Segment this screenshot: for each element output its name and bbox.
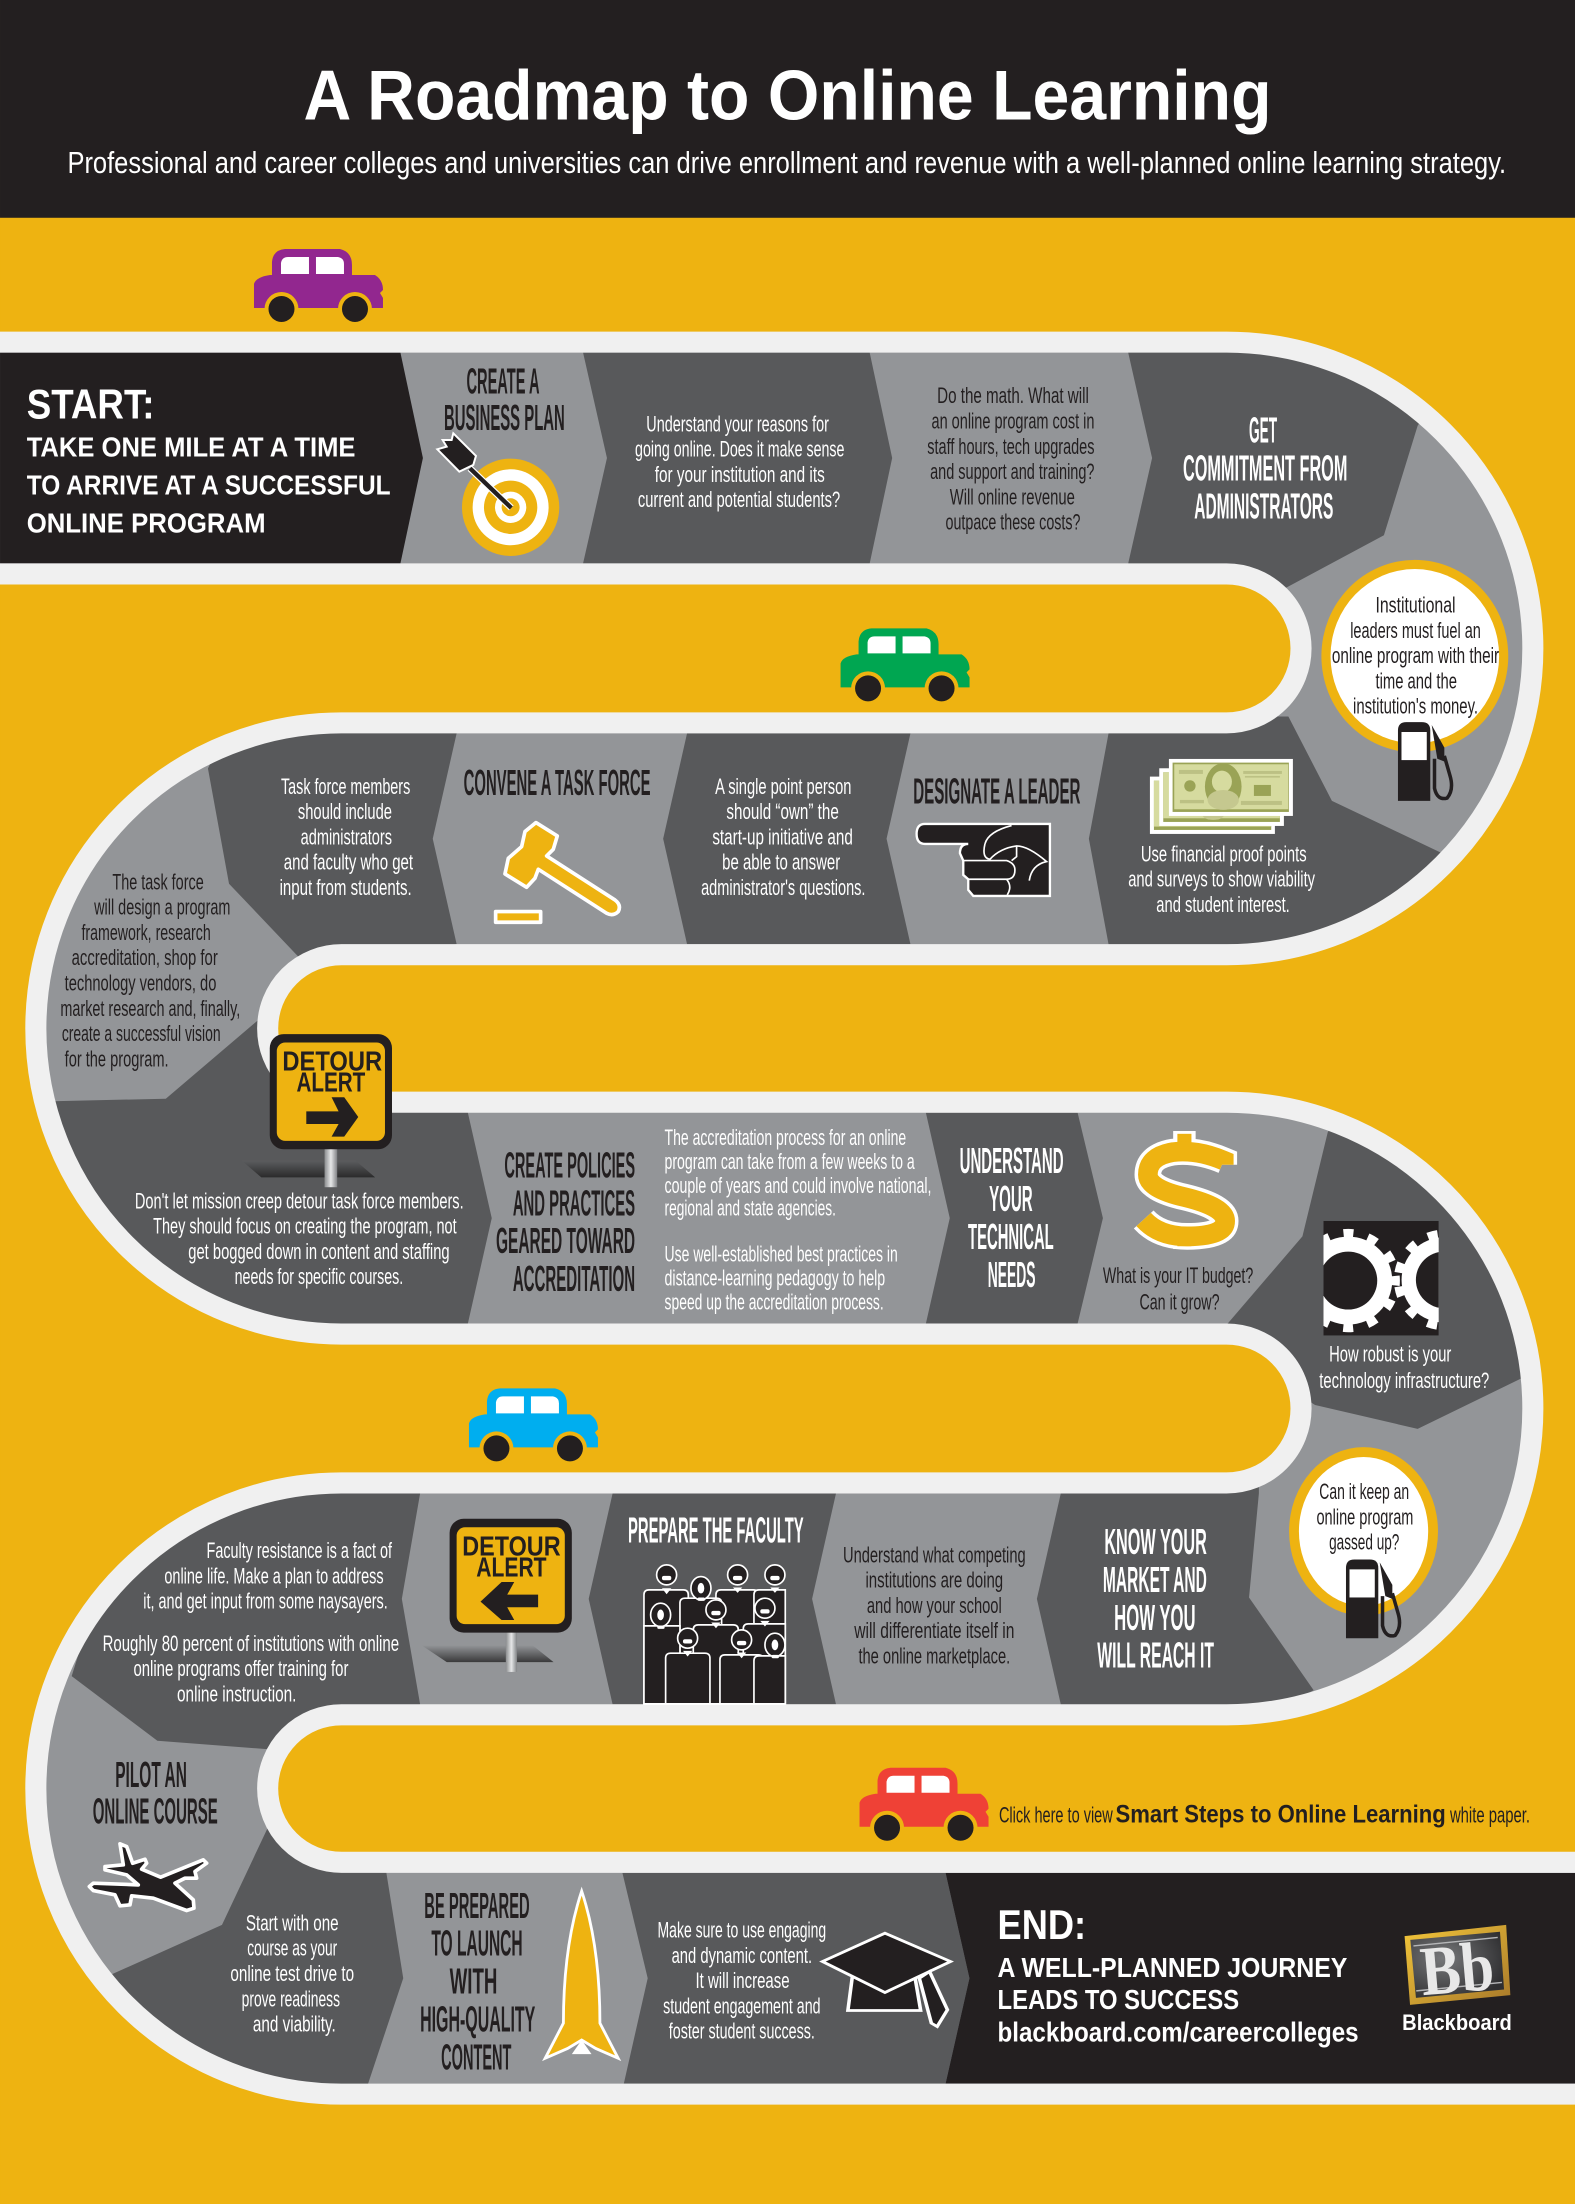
text: how robust	[1319, 1341, 1489, 1393]
icon: rocket	[545, 1891, 618, 2058]
start panel text: TO ARRIVE AT A SUCCESSFUL	[27, 470, 391, 501]
callout: institutional leaders: institution's money.	[1353, 694, 1478, 719]
text: task force members: input from students.	[280, 875, 412, 900]
link: smart steps white paper: white paper.	[1449, 1802, 1530, 1827]
text: faculty resistance: Roughly 80 percent of institutions with online	[103, 1631, 399, 1656]
text: DESIGNATE A LEADER	[913, 771, 1080, 812]
text: faculty resistance: Faculty resistance is a fact of	[207, 1538, 393, 1563]
text: UNDERSTAND	[960, 1140, 1064, 1181]
text: do the math: staff hours, tech upgrades	[927, 434, 1095, 459]
road white border	[0, 458, 1575, 1978]
text: understand your reasons: going online. Does it make sense	[635, 437, 844, 462]
text: do the math: Do the math. What will	[937, 383, 1089, 408]
text: make sure engaging	[658, 1917, 826, 2044]
text: faculty resistance: online instruction.	[177, 1681, 296, 1706]
link: smart steps white paper: Smart Steps to Online Learning	[1116, 1800, 1446, 1828]
car: red	[860, 1768, 989, 1845]
car: blue	[469, 1388, 598, 1465]
text: start with one course	[230, 1910, 354, 2037]
text: task force members: Task force members	[281, 774, 410, 799]
text: faculty resistance	[103, 1538, 399, 1706]
heading: get commitment: GET	[1249, 410, 1277, 451]
text: GEARED TOWARD	[496, 1220, 635, 1261]
text: mission creep	[135, 1188, 464, 1289]
text: the task force will design	[60, 869, 240, 1071]
end panel text	[998, 1901, 1359, 2047]
text: accreditation process: speed up the accreditation process.	[665, 1289, 884, 1314]
text: accreditation process: regional and state agencies.	[665, 1195, 836, 1220]
text: WILL REACH IT	[1097, 1635, 1214, 1676]
sign: detour alert right: ALERT	[296, 1067, 365, 1098]
end panel text: blackboard.com/careercolleges	[998, 2016, 1359, 2047]
text: task force members	[280, 774, 413, 900]
text: faculty resistance: online life. Make a plan to address	[164, 1563, 384, 1588]
text: mission creep: get bogged down in content and staffing	[188, 1239, 450, 1264]
car: green	[841, 628, 970, 705]
sign: detour alert right	[242, 1034, 392, 1187]
text: understand your reasons: for your institution and its	[655, 462, 825, 487]
text: do the math: outpace these costs?	[946, 510, 1080, 535]
heading: pilot an online course	[93, 1754, 218, 1832]
icon: fuel pump	[1398, 722, 1452, 801]
text: how robust: technology infrastructure?	[1319, 1368, 1489, 1393]
text: single point person: start-up initiative and	[712, 824, 853, 849]
icon: gears	[1324, 1221, 1439, 1336]
text: financial proof points: and student interest.	[1156, 892, 1290, 917]
header band: A Roadmap to Online Learning	[303, 55, 1272, 134]
text: mission creep: They should focus on creating the program, not	[153, 1214, 457, 1239]
text: do the math	[927, 383, 1095, 535]
callout: institutional leaders	[1321, 560, 1508, 752]
text: ACCREDITATION	[513, 1258, 635, 1299]
callout: institutional leaders: online program with their	[1332, 643, 1499, 668]
text: faculty resistance: it, and get input from some naysayers.	[143, 1589, 388, 1614]
text: TECHNICAL	[968, 1216, 1054, 1257]
callout: can it keep: gassed up?	[1329, 1530, 1399, 1555]
callout: institutional leaders: leaders must fuel an	[1350, 618, 1481, 643]
heading: pilot an online course: PILOT AN	[115, 1754, 187, 1795]
text: start with one course: online test drive to	[230, 1961, 354, 1986]
text: financial proof points: Use financial proof points	[1141, 841, 1307, 866]
icon: dollar sign	[1144, 1131, 1225, 1249]
icon: airplane	[89, 1844, 207, 1911]
text: understand competing	[843, 1542, 1026, 1669]
text: accreditation process: couple of years and could involve national,	[665, 1173, 932, 1198]
start panel text: START:	[27, 381, 155, 428]
text: make sure engaging: Make sure to use engaging	[658, 1917, 826, 1942]
text: COMMITMENT FROM	[1183, 448, 1347, 489]
heading: be prepared to launch	[420, 1885, 535, 2078]
end panel text: END:	[998, 1901, 1086, 1948]
text: single point person: should “own” the	[726, 799, 839, 824]
text: single point person: be able to answer	[722, 850, 840, 875]
text: the task force will design: technology vendors, do	[65, 971, 216, 996]
end panel text: A WELL-PLANNED JOURNEY	[998, 1952, 1348, 1983]
sign: detour alert right: DETOUR	[282, 1046, 382, 1077]
text: financial proof points	[1128, 841, 1315, 917]
heading: get commitment	[1183, 410, 1347, 526]
heading: be prepared to launch: WITH	[450, 1961, 497, 2002]
text: understand your reasons: current and potential students?	[638, 487, 840, 512]
start panel text: ONLINE PROGRAM	[27, 507, 266, 538]
callout: institutional leaders: time and the	[1375, 668, 1457, 693]
text: understand competing: institutions are doing	[865, 1568, 1003, 1593]
text: PREPARE THE FACULTY	[628, 1510, 804, 1551]
callout: institutional leaders: Institutional	[1375, 593, 1456, 618]
text: the task force will design: The task force	[112, 869, 204, 894]
sign: detour alert left: DETOUR	[462, 1530, 561, 1561]
text: the task force will design: will design a program	[93, 895, 230, 920]
heading: be prepared to launch: CONTENT	[441, 2037, 511, 2078]
text: the task force will design: for the program.	[65, 1046, 169, 1071]
text: accreditation process: distance-learning pedagogy to help	[665, 1266, 885, 1291]
text: accreditation process: Use well-established best practices in	[665, 1242, 898, 1267]
text: HIGH-QUALITY	[420, 1999, 535, 2040]
text: single point person	[701, 774, 865, 900]
text: task force members: administrators	[301, 824, 392, 849]
text: single point person: A single point person	[715, 774, 851, 799]
heading: create policies	[496, 1144, 635, 1299]
icon: money stack	[1150, 759, 1293, 834]
car: purple	[254, 249, 383, 326]
text: how robust: How robust is your	[1329, 1341, 1451, 1366]
text: the task force will design: market research and, finally,	[60, 996, 240, 1021]
text: the task force will design: accreditation, shop for	[72, 945, 218, 970]
text: start with one course: Start with one	[246, 1910, 339, 1935]
text: understand competing: and how your school	[867, 1593, 1002, 1618]
text: TO LAUNCH	[431, 1923, 523, 1964]
sign: detour alert left: ALERT	[476, 1551, 547, 1582]
text: KNOW YOUR	[1104, 1521, 1207, 1562]
text: understand competing: will differentiate itself in	[854, 1618, 1014, 1643]
blackboard logo: Bb	[1417, 1927, 1497, 2011]
text: single point person: administrator's questions.	[701, 875, 865, 900]
text: do the math: Will online revenue	[950, 484, 1075, 509]
text: financial proof points: and surveys to show viability	[1128, 867, 1315, 892]
text: BUSINESS PLAN	[444, 397, 565, 438]
text: do the math: an online program cost in	[932, 409, 1094, 434]
icon: target with arrow	[437, 433, 559, 556]
text: ADMINISTRATORS	[1194, 485, 1333, 526]
text: accreditation process: program can take from a few weeks to a	[665, 1149, 915, 1174]
blackboard logo	[1402, 1925, 1512, 2035]
sign: detour alert left	[422, 1519, 572, 1672]
text: start with one course: prove readiness	[242, 1986, 340, 2011]
icon: pointing hand	[917, 824, 1050, 896]
heading: create a business plan	[444, 360, 565, 438]
text: make sure engaging: foster student success.	[669, 2019, 815, 2044]
text: CONVENE A TASK FORCE	[464, 762, 651, 803]
link: smart steps white paper: Click here to view	[999, 1802, 1113, 1827]
blackboard logo: Blackboard	[1402, 2010, 1512, 2035]
heading: understand your technical needs	[960, 1140, 1064, 1295]
start panel text	[27, 381, 391, 538]
icon: gavel	[496, 823, 619, 922]
heading: create a business plan: CREATE A	[466, 360, 540, 401]
header band	[0, 0, 1575, 218]
text: understand your reasons: Understand your reasons for	[646, 411, 829, 436]
text: MARKET AND	[1103, 1559, 1207, 1600]
text: faculty resistance: online programs offer training for	[133, 1656, 348, 1681]
text: make sure engaging: student engagement and	[663, 1993, 821, 2018]
icon: fuel pump 2	[1346, 1560, 1400, 1638]
callout: can it keep	[1289, 1447, 1438, 1616]
start panel text: TAKE ONE MILE AT A TIME	[27, 432, 355, 463]
icon: graduation cap	[822, 1933, 951, 2027]
text: accreditation process	[665, 1125, 932, 1314]
text: AND PRACTICES	[513, 1182, 635, 1223]
text: start with one course: and viability.	[253, 2012, 336, 2037]
heading: understand your technical needs: NEEDS	[988, 1254, 1035, 1295]
text: it budget	[1103, 1263, 1253, 1314]
heading: know your market	[1097, 1521, 1214, 1676]
text: accreditation process: The accreditation process for an online	[665, 1125, 906, 1150]
callout: can it keep: online program	[1316, 1504, 1413, 1529]
icon: faculty group	[644, 1565, 785, 1704]
text: the task force will design: create a successful vision	[62, 1021, 221, 1046]
heading: know your market: HOW YOU	[1114, 1597, 1196, 1638]
text: it budget: Can it grow?	[1139, 1289, 1220, 1314]
text: the task force will design: framework, research	[81, 920, 211, 945]
text: make sure engaging: and dynamic content.	[672, 1943, 812, 1968]
heading: understand your technical needs: YOUR	[989, 1178, 1033, 1219]
text: ONLINE COURSE	[93, 1791, 218, 1832]
text: start with one course: course as your	[247, 1936, 337, 1961]
text: make sure engaging: It will increase	[695, 1968, 790, 1993]
end panel text: LEADS TO SUCCESS	[998, 1984, 1239, 2015]
text: mission creep: Don't let mission creep detour task force members.	[135, 1188, 464, 1213]
text: BE PREPARED	[424, 1885, 530, 1926]
text: understand competing: Understand what competing	[843, 1542, 1026, 1567]
text: task force members: and faculty who get	[284, 850, 413, 875]
text: understand your reasons	[635, 411, 844, 512]
text: it budget: What is your IT budget?	[1103, 1263, 1253, 1288]
text: mission creep: needs for specific courses.	[235, 1264, 403, 1289]
text: CREATE POLICIES	[504, 1144, 635, 1185]
text: understand competing: the online marketplace.	[858, 1644, 1010, 1669]
text: task force members: should include	[298, 799, 392, 824]
text: do the math: and support and training?	[930, 459, 1094, 484]
callout: can it keep: Can it keep an	[1319, 1479, 1409, 1504]
